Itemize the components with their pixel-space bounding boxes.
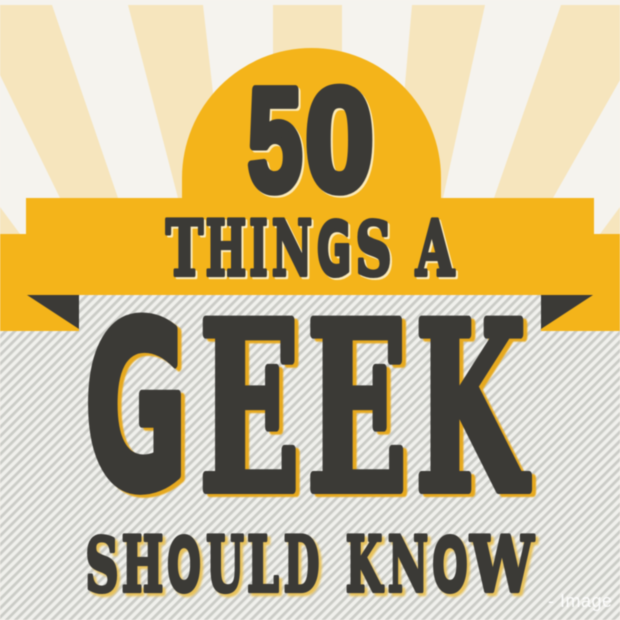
- number 50: [248, 58, 374, 222]
- heading: geek: G: [84, 274, 188, 542]
- sunburst rays: [0, 5, 620, 234]
- number 50: 0: [305, 58, 374, 221]
- heading: things a: T: [166, 205, 203, 294]
- heading: geek: E: [199, 272, 300, 545]
- heading: things a: [166, 204, 455, 294]
- number 50: 5: [248, 58, 302, 222]
- yellow banner with dome: [0, 48, 620, 331]
- subheading: should know: N: [388, 520, 428, 609]
- heading: things a: I: [249, 205, 268, 294]
- heading: geek: K: [415, 272, 530, 545]
- subheading: should know: D: [284, 521, 319, 610]
- subheading: should know: W: [470, 519, 534, 609]
- watermark: - Image: [548, 591, 613, 611]
- heading: things a: S: [355, 206, 392, 293]
- subheading: should know: U: [206, 520, 244, 609]
- heading: things a: G: [317, 207, 351, 293]
- heading: things a: N: [272, 204, 312, 293]
- subheading: should know: K: [346, 520, 384, 610]
- subheading: should know: H: [122, 520, 163, 609]
- right ribbon fold: [541, 295, 593, 329]
- subheading: should know: L: [247, 519, 279, 609]
- subheading: should know: O: [167, 524, 201, 610]
- subheading: should know: O: [432, 523, 468, 609]
- striped lower panel: [0, 295, 620, 620]
- left ribbon fold: [27, 295, 79, 329]
- heading: things a: A: [415, 205, 455, 294]
- heading: things a: H: [206, 204, 246, 293]
- heading: geek: E: [307, 272, 407, 545]
- subheading: should know: S: [85, 521, 119, 609]
- subheading: should know: [85, 519, 534, 610]
- heading: geek: [84, 272, 530, 545]
